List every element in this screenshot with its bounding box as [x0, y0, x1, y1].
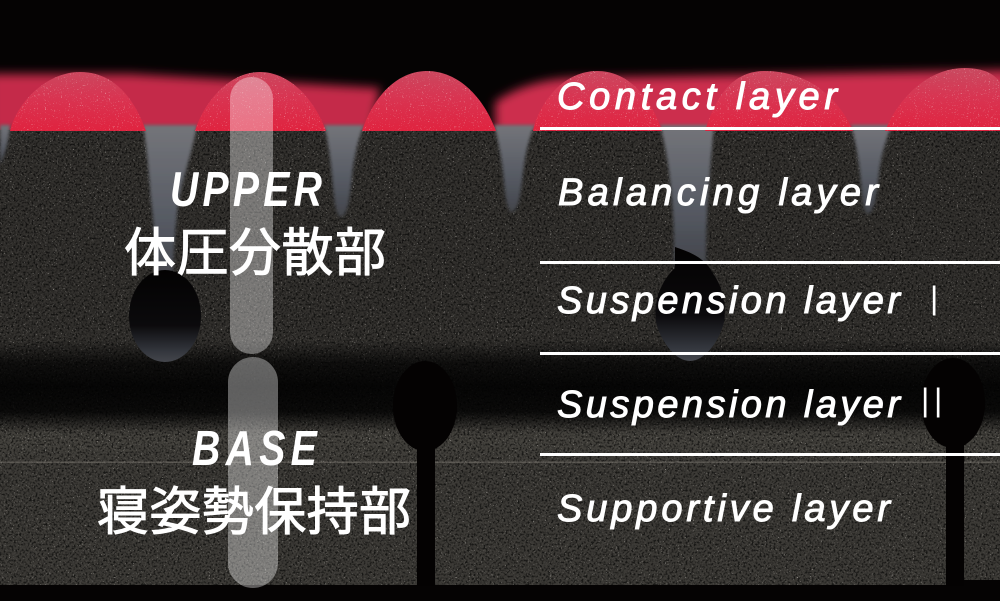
base heading: 寝姿勢保持部 [97, 484, 411, 542]
back row of red foam peaks [0, 70, 1000, 132]
foam grain texture [0, 130, 1000, 585]
label: contact layer: Contact layer [557, 76, 838, 118]
label: suspension layer I: Suspension layer [557, 280, 901, 322]
keyhole slit: left [393, 361, 457, 586]
upper heading [124, 163, 386, 283]
base section bar [228, 357, 278, 588]
divider lines [540, 127, 1000, 456]
upper heading: 体圧分散部 [124, 225, 386, 283]
label: suspension layer II: | [934, 382, 942, 418]
foam body [0, 125, 1000, 585]
dark shadow band [0, 340, 1000, 432]
base heading: BASE [192, 422, 318, 476]
hole: left [129, 270, 201, 362]
upper heading: UPPER [170, 163, 322, 217]
red contact layer peaks [0, 66, 1000, 132]
hole: right [655, 247, 725, 361]
label: suspension layer II: | [921, 382, 929, 418]
keyhole slit: right [921, 358, 985, 586]
foam holes [129, 247, 725, 362]
recess gaps between foam peaks [0, 125, 892, 285]
bright seam [0, 462, 1000, 463]
label: suspension layer II: Suspension layer [557, 384, 901, 426]
label: balancing layer: Balancing layer [558, 172, 879, 214]
upper section bar [230, 77, 273, 354]
label: supportive layer: Supportive layer [557, 488, 891, 530]
label: suspension layer I: | [930, 280, 938, 316]
base heading [97, 422, 411, 542]
